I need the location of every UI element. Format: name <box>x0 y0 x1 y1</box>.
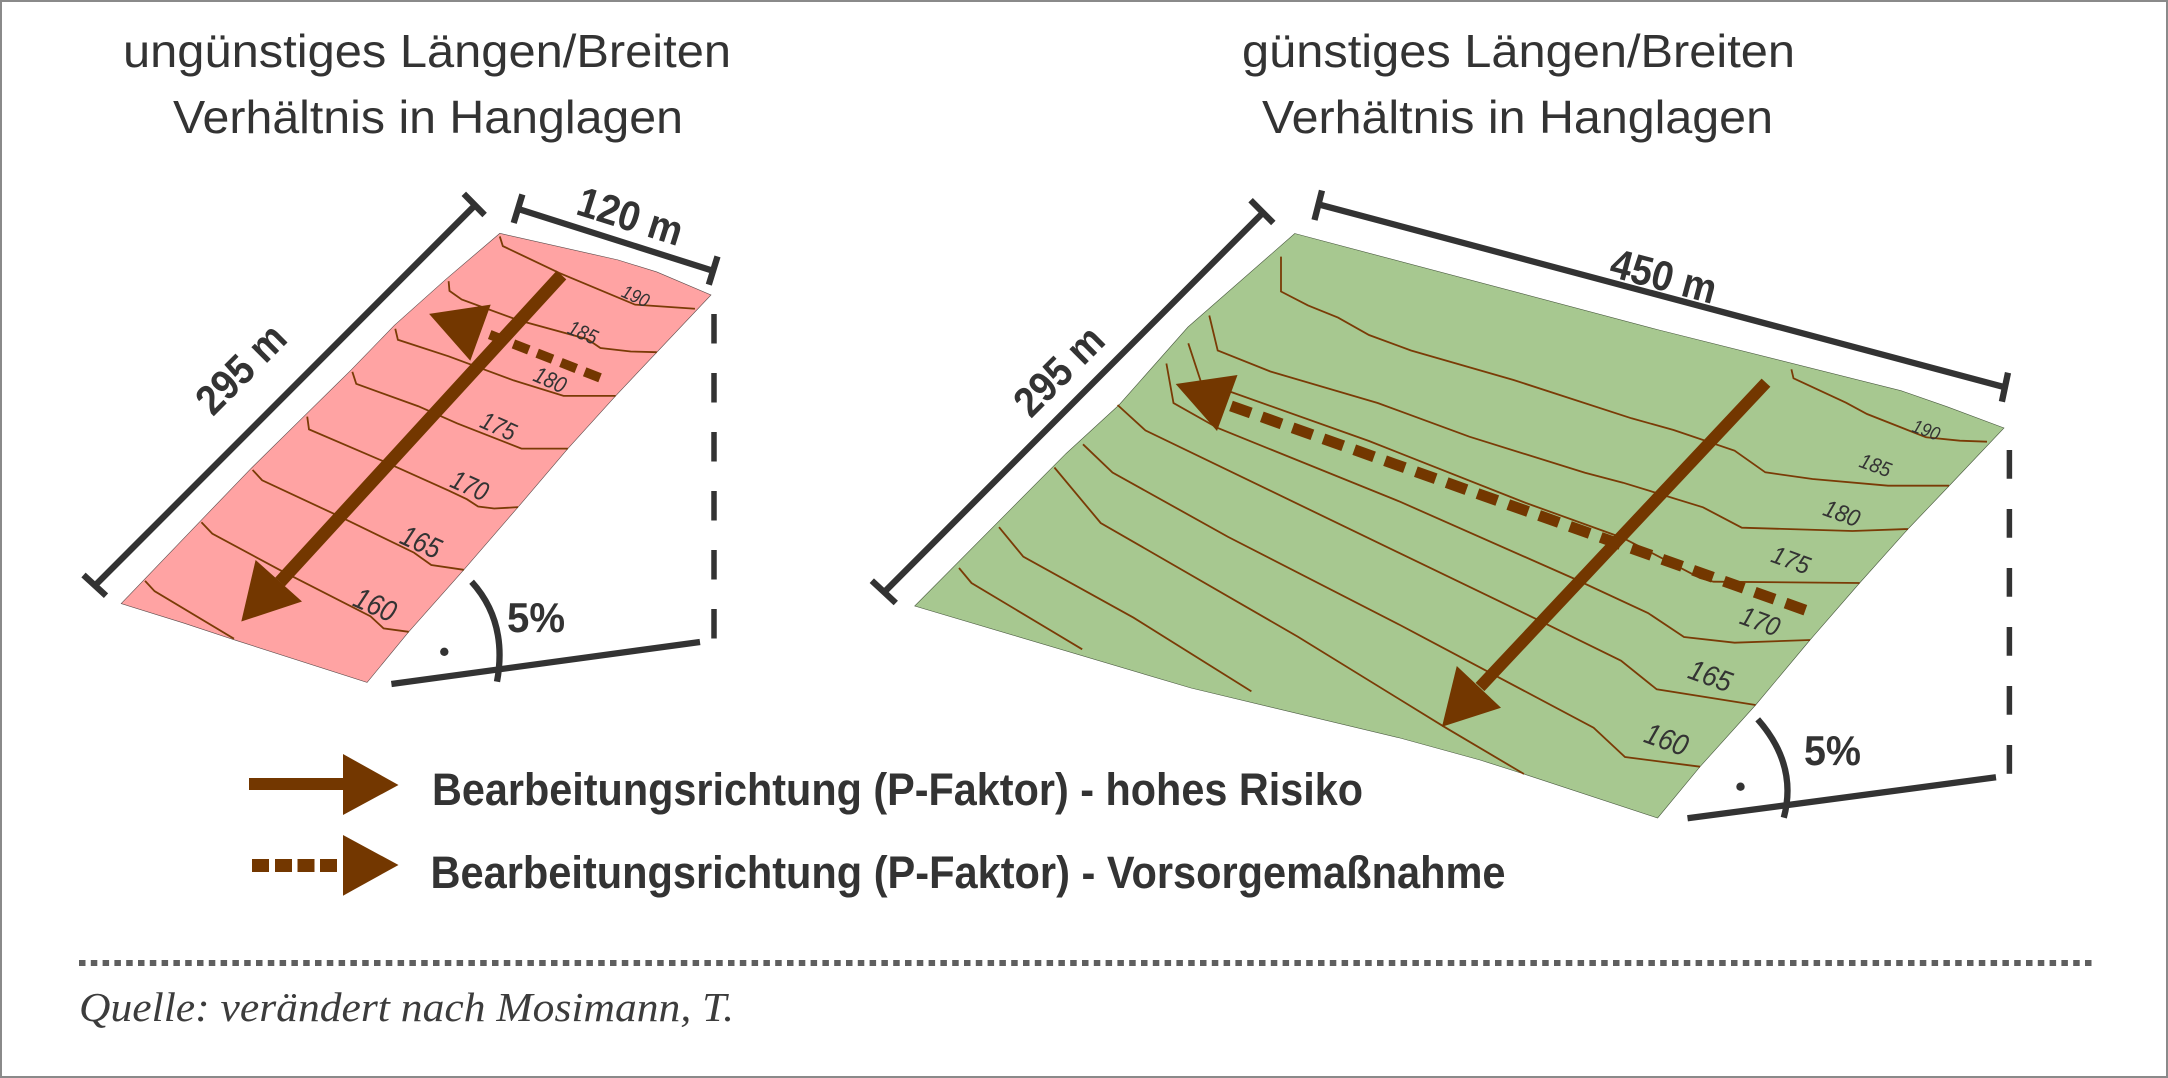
contour labels <box>349 282 653 629</box>
contour labels: 185 <box>1856 450 1894 482</box>
dimension: 295 m <box>872 200 1273 603</box>
dimension: 295 m: 295 m <box>1004 316 1114 426</box>
arrow: preventive direction <box>1176 375 1806 610</box>
green field <box>915 234 2004 818</box>
contour labels: 190 <box>618 282 653 312</box>
pink field with contours <box>121 233 711 682</box>
contour labels: 180 <box>1820 495 1864 533</box>
contour lines <box>959 257 1987 774</box>
contour labels: 170 <box>1736 601 1784 642</box>
panel: unfavourable field (pink) <box>84 178 718 684</box>
slope triangle: 5%: 5% <box>1804 727 1861 774</box>
dimension: 120 m <box>514 178 718 285</box>
contour labels: 170 <box>446 464 493 507</box>
contour labels: 190 <box>1909 416 1943 446</box>
panel: favourable field (green) <box>872 190 2009 818</box>
title: right panel: Verhältnis in Hanglagen <box>1262 91 1773 143</box>
arrow: preventive direction <box>429 305 600 378</box>
contour labels: 175 <box>476 407 520 447</box>
dimension: 295 m <box>84 194 485 596</box>
contour labels: 175 <box>1768 541 1814 580</box>
contour labels: 180 <box>530 361 571 398</box>
contour labels: 160 <box>349 582 401 629</box>
icon: solid arrow <box>249 754 398 815</box>
contour labels: 160 <box>1640 717 1693 763</box>
title: left panel: ungünstiges Längen/Breiten <box>123 25 731 77</box>
legend: preventive measure <box>252 835 1506 898</box>
title: left panel: Verhältnis in Hanglagen <box>173 91 683 143</box>
legend: preventive measure: Bearbeitungsrichtung (P-Faktor) - Vorsorgemaßnahme <box>430 847 1506 898</box>
title: right panel <box>1242 25 1795 143</box>
slope triangle: 5% <box>391 314 714 684</box>
legend: high risk <box>249 754 1363 815</box>
contour labels: 165 <box>1684 654 1737 699</box>
slope triangle: 5% <box>1688 450 2009 818</box>
title: left panel <box>123 25 731 143</box>
legend: high risk: Bearbeitungsrichtung (P-Faktor) - hohes Risiko <box>432 764 1363 815</box>
title: right panel: günstiges Längen/Breiten <box>1242 25 1795 77</box>
slope triangle: 5%: 5% <box>507 594 565 641</box>
dimension: 120 m: 120 m <box>572 178 689 255</box>
contour labels: 165 <box>395 520 447 566</box>
dimension: 450 m <box>1314 190 2008 402</box>
source note: Quelle: verändert nach Mosimann, T. <box>79 984 734 1030</box>
icon: dashed arrow <box>252 835 398 896</box>
arrow: high risk direction <box>241 275 562 622</box>
dimension: 295 m: 295 m <box>186 314 296 424</box>
contour labels: 185 <box>564 316 601 350</box>
arrow: high risk direction <box>1442 383 1766 727</box>
dimension: 450 m: 450 m <box>1606 239 1722 313</box>
contour labels <box>1640 416 1943 763</box>
